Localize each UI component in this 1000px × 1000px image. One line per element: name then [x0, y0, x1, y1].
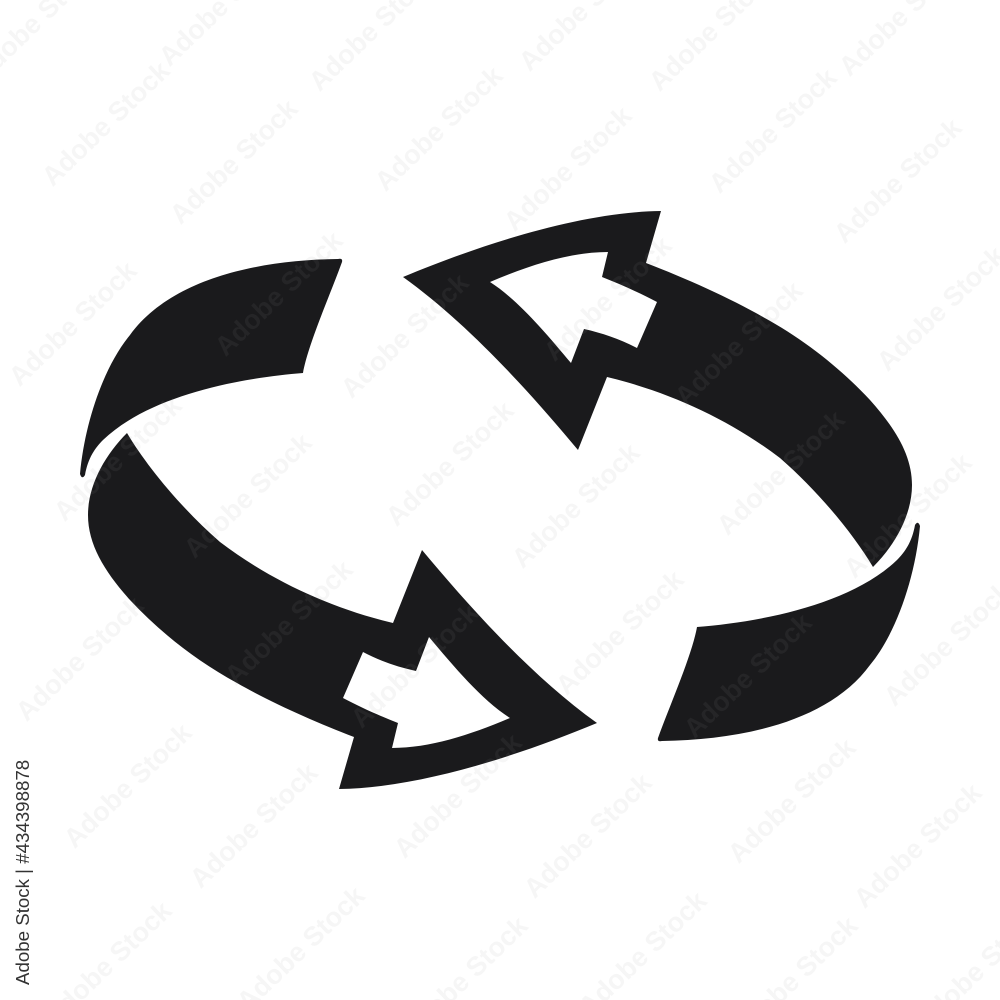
- watermark pattern: Adobe Stock: [209, 225, 349, 362]
- watermark pattern: Adobe Stock: [36, 55, 176, 192]
- watermark pattern: Adobe Stock: [48, 390, 188, 527]
- watermark pattern: Adobe Stock: [538, 230, 678, 367]
- stock id label: Adobe Stock | #434398878: [12, 760, 33, 985]
- watermark pattern: Adobe Stock: [219, 554, 359, 691]
- watermark pattern: Adobe Stock: [518, 767, 658, 904]
- watermark pattern: Adobe Stock: [164, 93, 304, 230]
- watermark pattern: Adobe Stock: [380, 395, 520, 532]
- watermark pattern: Adobe Stock: [703, 62, 843, 199]
- watermark pattern: Adobe Stock: [828, 112, 968, 249]
- watermark pattern: Adobe Stock: [3, 255, 143, 392]
- watermark pattern: Adobe Stock: [669, 275, 809, 412]
- ribbon tail: upper left: [80, 259, 342, 477]
- watermark pattern: Adobe Stock: [178, 427, 318, 564]
- arrow: upper right pointing left: [403, 211, 912, 567]
- ribbon tail: lower right: [658, 523, 920, 741]
- watermark pattern: Adobe Stock: [506, 437, 646, 574]
- watermark pattern: Adobe Stock: [678, 607, 818, 744]
- watermark pattern: Adobe Stock: [498, 100, 638, 237]
- watermark pattern: Adobe Stock: [388, 727, 528, 864]
- icon: circular arrows: [80, 211, 920, 789]
- watermark pattern: Adobe Stock: [369, 60, 509, 197]
- watermark pattern: Adobe Stock: [335, 267, 475, 404]
- watermark pattern: Adobe Stock: [58, 717, 198, 854]
- watermark pattern: Adobe Stock: [184, 757, 324, 894]
- watermark pattern: Adobe Stock: [345, 597, 485, 734]
- watermark pattern: Adobe Stock: [711, 404, 851, 541]
- watermark pattern: Adobe Stock: [848, 777, 988, 914]
- arrow: lower left pointing right: [88, 433, 597, 789]
- watermark pattern: Adobe Stock: [722, 732, 862, 869]
- watermark pattern: Adobe Stock: [10, 590, 150, 727]
- watermark pattern: Adobe Stock: [550, 564, 690, 701]
- watermark pattern: Adobe Stock: [838, 447, 978, 584]
